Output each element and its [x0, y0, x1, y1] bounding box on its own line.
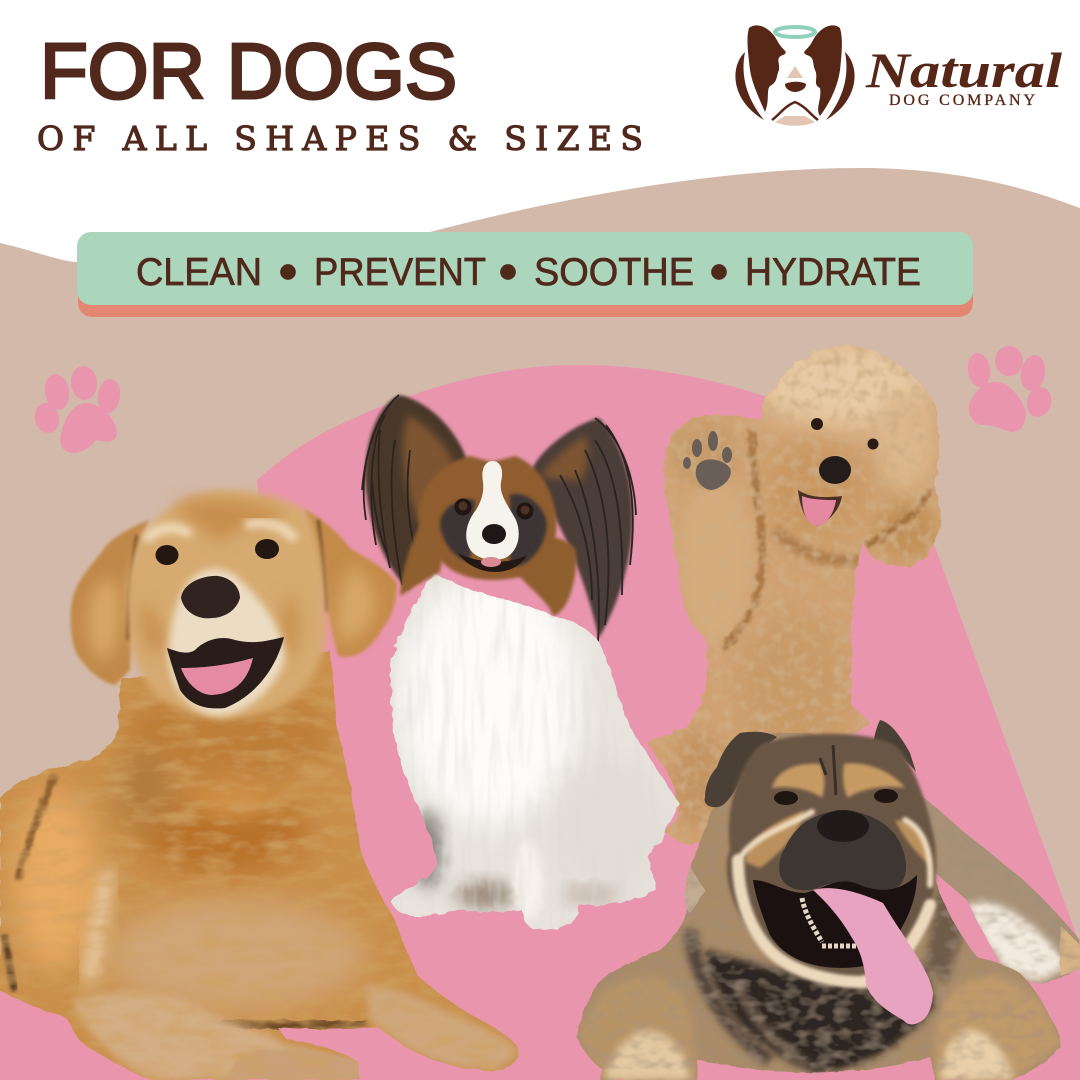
bulldog rear leg [923, 797, 1080, 984]
papillon eyes nose mouth [454, 498, 534, 572]
bulldog teeth [802, 898, 860, 946]
logo icon: bulldog with halo [735, 25, 855, 126]
logo wordmark: natural: Natural [865, 42, 1062, 98]
banner: clean prevent soothe hydrate [77, 232, 973, 317]
bulldog nose [817, 810, 869, 842]
golden mouth and tongue [167, 637, 284, 708]
banner face [77, 232, 973, 305]
poodle paw pads [683, 431, 732, 490]
poodle ear fold [866, 490, 930, 545]
logo tagline: dog company: DOG COMPANY [889, 92, 1035, 109]
bulldog dark muzzle [779, 810, 906, 892]
poodle eyes nose and tongue [798, 418, 878, 526]
papillon dark eye mask [440, 494, 547, 567]
bulldog eyes [774, 789, 898, 805]
subheading: of all shapes and sizes: OF ALL SHAPES & SIZES [37, 119, 643, 158]
golden body fur [0, 640, 530, 1080]
golden nose [181, 576, 240, 618]
bulldog brow wrinkle [820, 745, 836, 795]
banner text: CLEAN [136, 251, 262, 294]
papillon ears [362, 395, 636, 642]
banner text: HYDRATE [745, 251, 921, 294]
papillon head [419, 456, 557, 580]
golden forehead and cheek tones [140, 499, 299, 660]
bulldog body [570, 725, 1080, 1080]
banner text: PREVENT [314, 251, 486, 294]
banner text: SOOTHE [534, 251, 694, 294]
heading: for dogs: FOR DOGS [40, 27, 457, 115]
poodle chin shadow [775, 530, 860, 560]
dog: papillon [362, 395, 690, 940]
papillon brown neck patches [400, 520, 576, 616]
dog: golden retriever [0, 491, 530, 1080]
dog: poodle [640, 340, 950, 850]
banner shadow bar [78, 245, 973, 317]
icon: right paw print [966, 346, 1055, 432]
golden left ear [71, 520, 149, 685]
dog: bulldog [570, 720, 1080, 1080]
golden ear creases [128, 520, 326, 640]
bulldog brow patches [772, 763, 905, 798]
papillon face blaze [466, 461, 519, 560]
bulldog cream collar and cheek folds [738, 812, 930, 982]
bulldog cheek tan [745, 810, 930, 868]
bulldog ears [705, 720, 916, 807]
icon: left paw print [32, 365, 122, 453]
golden head [126, 491, 326, 718]
bulldog open mouth [753, 875, 917, 968]
logo: natural dog company [735, 25, 1062, 126]
golden right ear [304, 509, 397, 657]
poodle leg fold [722, 430, 762, 648]
bulldog tongue [813, 888, 933, 1024]
bulldog head [727, 734, 936, 985]
papillon white chest and body [390, 573, 680, 930]
pink blob background [0, 365, 1080, 1080]
banner text [136, 251, 921, 294]
golden eyes [156, 539, 279, 565]
golden muzzle [168, 569, 285, 716]
golden brow highlights [145, 523, 295, 540]
poodle fur silhouette [640, 340, 950, 850]
golden ear highlights [88, 565, 375, 661]
